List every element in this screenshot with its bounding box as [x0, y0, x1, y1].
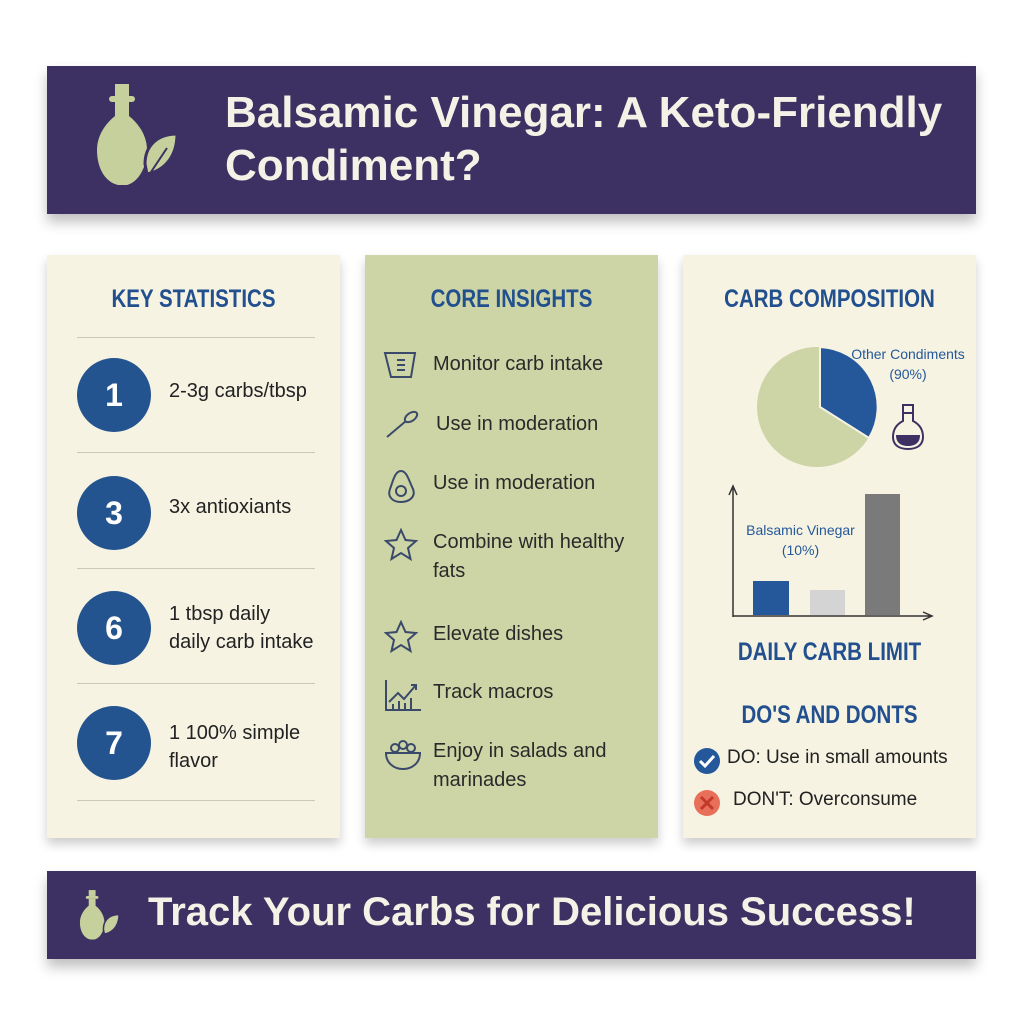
insight: avocado [388, 470, 595, 503]
dont item [694, 789, 917, 816]
heading: CARB COMPOSITION [724, 285, 935, 313]
insight: avocado: Use in moderation [433, 472, 595, 494]
title: Balsamic Vinegar: A Keto-Friendly [225, 88, 942, 137]
icon: small bottle [892, 404, 924, 450]
insight: combine: fats [433, 560, 465, 582]
insight: spoon [386, 410, 598, 438]
heading: KEY STATISTICS [111, 285, 276, 313]
stat 7: 1 100% simple [169, 722, 300, 744]
stat 6: 1 tbsp daily [169, 603, 270, 625]
heading: CORE INSIGHTS [431, 285, 592, 313]
stat 1 [77, 358, 307, 432]
insight: track [385, 680, 553, 711]
bar label [746, 522, 855, 558]
stat 6: 6 [105, 610, 123, 646]
footer text: Track Your Carbs for Delicious Success! [148, 890, 916, 934]
heading: daily carb limit: DAILY CARB LIMIT [738, 638, 921, 666]
insight: monitor: Monitor carb intake [433, 353, 603, 375]
stat 3: 3x antioxiants [169, 496, 291, 518]
insight: combine [384, 528, 624, 582]
insight: salad: Enjoy in salads and [433, 740, 606, 762]
panel: core insights [365, 255, 658, 838]
pie label: Other Condiments [851, 346, 965, 362]
insight: spoon: Use in moderation [436, 413, 598, 435]
do item [694, 747, 948, 774]
pie chart [728, 347, 934, 621]
header banner [47, 66, 976, 214]
insight: elevate: Elevate dishes [433, 623, 563, 645]
stat 3: 3 [105, 495, 123, 531]
stat 6 [77, 591, 314, 665]
insight: combine: Combine with healthy [433, 531, 624, 553]
title [225, 88, 942, 190]
do item: DO: Use in small amounts [727, 747, 948, 768]
footer banner [47, 871, 976, 959]
insight: salad: marinades [433, 769, 526, 791]
bar label: Balsamic Vinegar [746, 522, 855, 538]
stat 7: flavor [169, 750, 218, 772]
stat 7 [77, 706, 300, 780]
heading: dos and donts: DO'S AND DONTS [741, 701, 918, 729]
icon: vinegar bottle with leaf [97, 84, 176, 185]
dont item: DON'T: Overconsume [733, 789, 917, 810]
stat 1: 1 [105, 377, 123, 413]
title: Condiment? [225, 141, 482, 190]
panel: carb composition [683, 255, 976, 838]
insight: salad [385, 740, 606, 791]
pie label [851, 346, 965, 382]
pie label: (90%) [889, 366, 927, 382]
stat 1: 2-3g carbs/tbsp [169, 380, 307, 402]
stat 3 [77, 476, 291, 550]
panel: key statistics [47, 255, 340, 838]
insight: monitor [384, 352, 603, 378]
bar label: (10%) [782, 542, 819, 558]
bar chart [729, 486, 932, 620]
insight: track: Track macros [433, 681, 553, 703]
insight: elevate [384, 620, 563, 653]
stat 6: daily carb intake [169, 631, 314, 653]
stat 7: 7 [105, 725, 123, 761]
icon: small bottle with leaf [80, 890, 118, 940]
